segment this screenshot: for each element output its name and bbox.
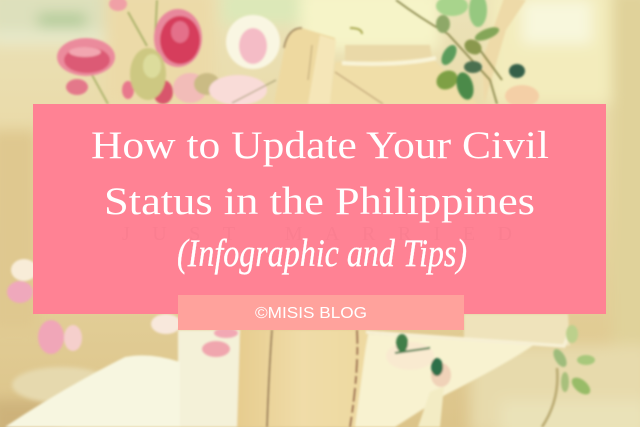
chair back <box>274 0 526 104</box>
title: How to Update Your Civil <box>91 124 549 167</box>
title <box>91 124 549 223</box>
leaves top right <box>350 0 539 107</box>
credit bar: ©MISIS BLOG <box>255 305 367 322</box>
title: Status in the Philippines <box>104 180 535 223</box>
lower flowers and leaves <box>7 259 595 427</box>
lower chair: wood slat and seat <box>5 314 570 427</box>
faint photo text ghost: JUST MARRIED <box>122 223 512 245</box>
subtitle: (Infographic and Tips) <box>177 232 467 275</box>
credit bar <box>178 295 464 330</box>
flowers top left <box>57 0 280 105</box>
panel: pink title banner <box>33 104 606 314</box>
